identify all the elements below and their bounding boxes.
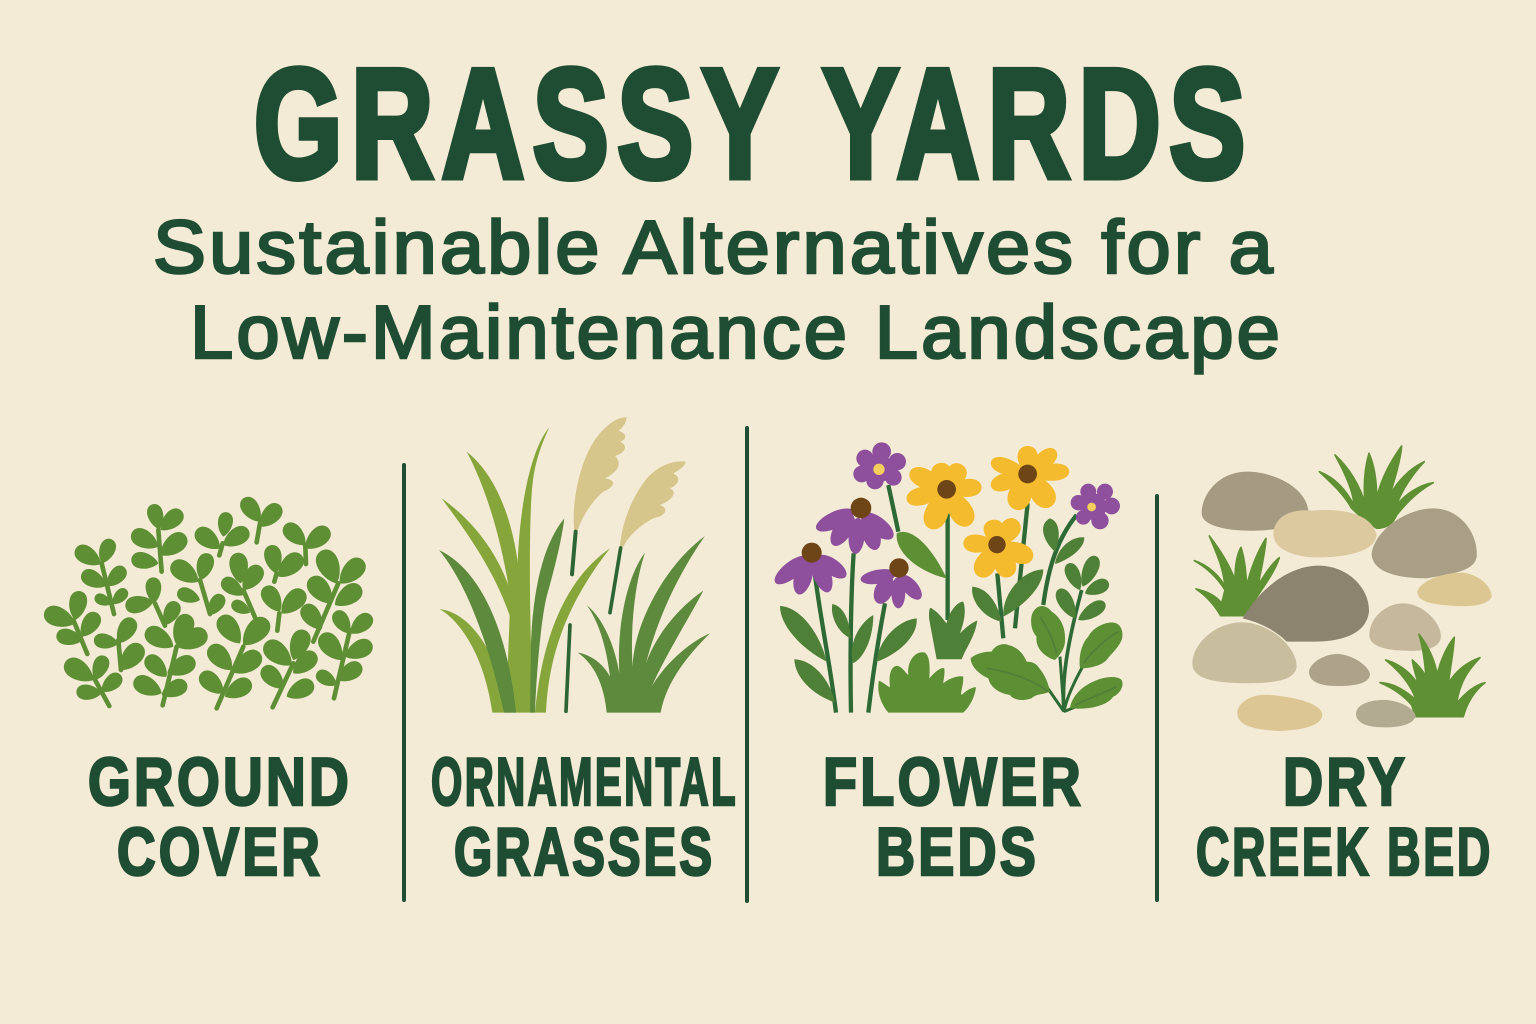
subtitle: Low-Maintenance Landscape — [190, 290, 1283, 374]
label: dry creek bed — [1196, 744, 1493, 890]
rocks — [1192, 472, 1492, 731]
panel: flower beds — [770, 442, 1123, 890]
panel: dry creek bed — [1192, 446, 1493, 890]
yellow daisies — [904, 444, 1070, 582]
panel: ground cover — [41, 493, 377, 890]
plumes — [574, 417, 686, 547]
icon: ornamental grasses — [439, 417, 710, 713]
icon: ground cover sprigs — [41, 493, 377, 708]
label: ornamental grasses: GRASSES — [454, 814, 715, 890]
purple coneflowers — [770, 442, 1120, 608]
label: flower beds: BEDS — [876, 814, 1039, 890]
label: ground cover — [88, 744, 352, 890]
divider lines — [404, 428, 1157, 901]
label: ground cover: COVER — [117, 814, 323, 890]
subtitle — [153, 205, 1283, 374]
dark leaves — [780, 518, 1112, 703]
label: ornamental grasses — [431, 744, 738, 890]
label: ornamental grasses: ORNAMENTAL — [431, 744, 738, 820]
left grass clump — [439, 427, 610, 713]
stems — [566, 532, 621, 711]
icon: flower beds — [770, 442, 1123, 713]
small front rock — [1356, 700, 1416, 727]
leaf veins — [987, 617, 1118, 705]
label: ground cover: GROUND — [88, 744, 352, 820]
label: dry creek bed: DRY — [1283, 744, 1408, 820]
flower stems — [814, 485, 1088, 713]
panel: ornamental grasses — [431, 417, 738, 890]
flower centres — [802, 465, 1037, 578]
label: flower beds: FLOWER — [823, 744, 1084, 820]
grass tufts behind rocks — [1194, 446, 1433, 616]
icon: rocks and grass tufts — [1192, 446, 1492, 731]
right grass clump — [578, 536, 710, 713]
subtitle: Sustainable Alternatives for a — [153, 205, 1276, 289]
light leaves — [878, 532, 1123, 713]
label: flower beds — [823, 744, 1084, 890]
front grass tuft — [1380, 634, 1485, 717]
small purple flowers — [853, 442, 1120, 529]
